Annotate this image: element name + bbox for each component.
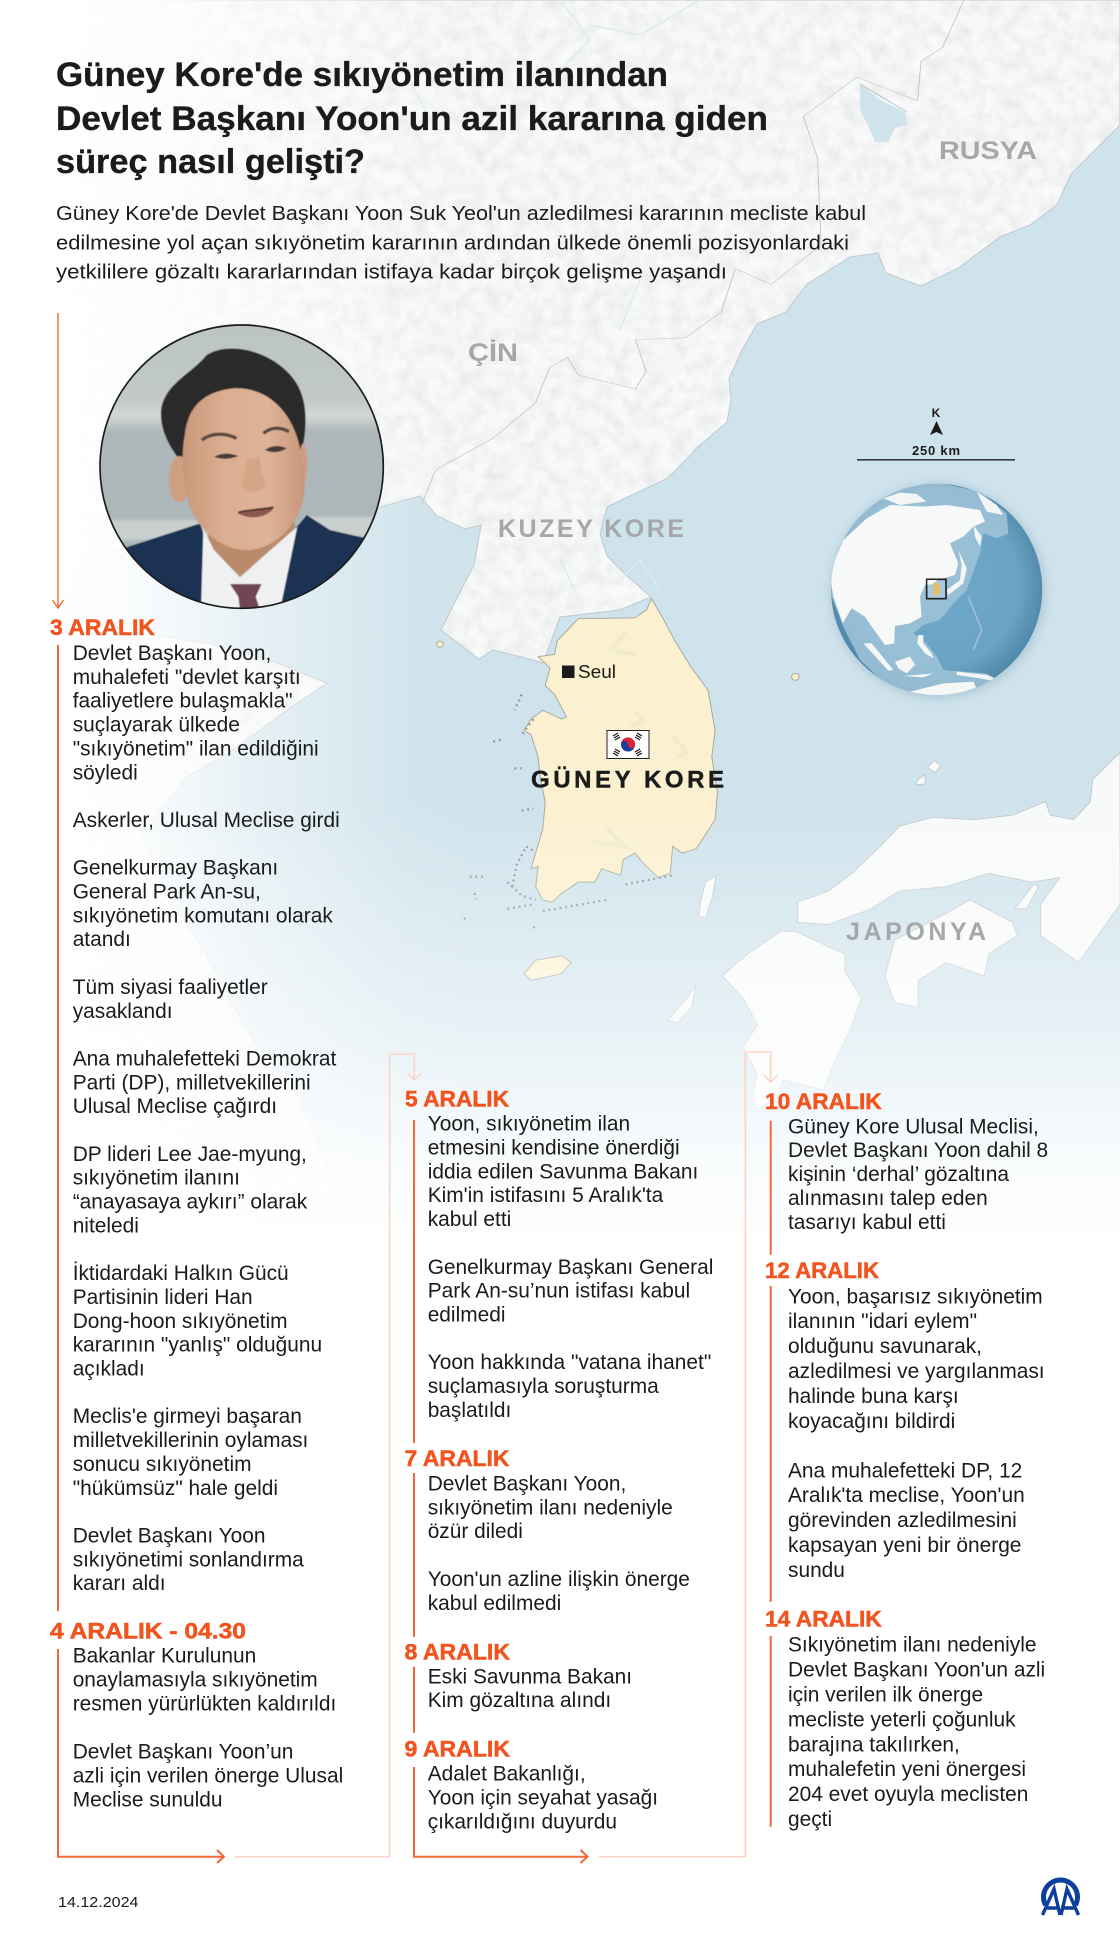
suit xyxy=(126,514,364,602)
date: 3 Aralık: 3 ARALIK xyxy=(50,615,155,640)
mouth xyxy=(237,507,274,517)
text block: 12 Aralık events xyxy=(788,1285,1045,1582)
compass and scale bar: 250 km xyxy=(912,443,960,458)
timeline line 8 Aralık xyxy=(413,1667,415,1733)
timeline arrow to column 3 xyxy=(414,1767,588,1863)
Japan xyxy=(947,550,967,595)
text block: 3 Aralık events: Askerler, Ulusal Meclise girdi xyxy=(73,809,340,832)
text block: 5 Aralık events: Genelkurmay Başkanı General xyxy=(428,1256,713,1279)
borders xyxy=(421,0,964,506)
shelf seas xyxy=(830,482,1008,698)
tie xyxy=(230,584,262,610)
text block: 12 Aralık events: sundu xyxy=(788,1559,845,1582)
label: Güney Kore: GÜNEY KORE xyxy=(531,766,724,794)
connector: column 1 to column 2 xyxy=(235,1054,421,1857)
text block: 3 Aralık events: Dong-hoon sıkıyönetim xyxy=(73,1310,288,1333)
text block: 14 Aralık events: mecliste yeterli çoğunluk xyxy=(788,1708,1016,1731)
South Korea marker xyxy=(927,579,946,599)
neck xyxy=(207,520,296,577)
eyes xyxy=(214,446,287,459)
date stamp: 14.12.2024 xyxy=(58,1895,138,1911)
text block: 12 Aralık events: azledilmesi ve yargılanması xyxy=(788,1360,1045,1383)
icon: South Korea flag xyxy=(607,730,649,758)
text block: 3 Aralık events: niteledi xyxy=(73,1214,139,1237)
text block: 3 Aralık events: söyledi xyxy=(73,761,138,784)
text block: 8 Aralık events: Kim gözaltına alındı xyxy=(428,1689,611,1712)
text block: 10 Aralık events: kişinin ‘derhal’ gözaltına xyxy=(788,1163,1009,1186)
arrow: start of timeline xyxy=(52,313,64,608)
text block: 12 Aralık events: halinde buna karşı xyxy=(788,1385,959,1408)
intro text: yetkililere gözaltı kararlarından istifaya kadar birçok gelişme yaşandı xyxy=(56,262,727,284)
text block: 10 Aralık events: tasarıyı kabul etti xyxy=(788,1211,946,1234)
text block: 3 Aralık events: Parti (DP), milletvekillerini xyxy=(73,1071,311,1094)
text block: 10 Aralık events: Güney Kore Ulusal Meclisi, xyxy=(788,1115,1039,1138)
text block: 3 Aralık events: sonucu sıkıyönetim xyxy=(73,1453,252,1476)
icon: AA logo xyxy=(1042,1880,1078,1915)
land: Japan xyxy=(668,753,1120,1110)
text block: 3 Aralık events: faaliyetlere bulaşmakla" xyxy=(73,690,293,713)
intro text xyxy=(56,203,866,284)
text block: 3 Aralık events: DP lideri Lee Jae-myung, xyxy=(73,1143,307,1166)
text block: 4 Aralık events xyxy=(73,1645,343,1811)
text block: 3 Aralık events: Partisinin lideri Han xyxy=(73,1286,253,1309)
text block: 3 Aralık events: yasaklandı xyxy=(73,1000,173,1023)
shirt xyxy=(201,527,297,610)
text block: 5 Aralık events: kabul etti xyxy=(428,1208,511,1231)
text block: 3 Aralık events: sıkıyönetim komutanı olarak xyxy=(73,904,333,927)
text block: 3 Aralık events: atandı xyxy=(73,928,131,951)
text block: 5 Aralık events: Park An-su’nun istifası kabul xyxy=(428,1280,690,1303)
text block: 3 Aralık events: kararının "yanlış" olduğunu xyxy=(73,1334,322,1357)
Australia xyxy=(910,682,976,695)
text block: 12 Aralık events: olduğunu savunarak, xyxy=(788,1335,982,1358)
bottom fade xyxy=(0,800,1120,1947)
label: Japonya: JAPONYA xyxy=(846,918,986,946)
timeline line 5 Aralık xyxy=(413,1120,415,1443)
text block: 14 Aralık events: Sıkıyönetim ilanı nedeniyle xyxy=(788,1634,1037,1657)
title xyxy=(56,56,768,181)
text block: 8 Aralık events: Eski Savunma Bakanı xyxy=(428,1665,632,1688)
text block: 4 Aralık events: resmen yürürlükten kaldırıldı xyxy=(73,1692,336,1715)
text block: 3 Aralık events: “anayasaya aykırı” olarak xyxy=(73,1191,308,1214)
face xyxy=(183,388,305,550)
text block: 3 Aralık events: İktidardaki Halkın Gücü xyxy=(73,1262,289,1285)
text block: 7 Aralık events xyxy=(428,1472,690,1615)
connector: column 2 to column 3 xyxy=(599,1052,778,1857)
timeline arrow to column 2 xyxy=(58,1649,224,1863)
text block: 14 Aralık events: Devlet Başkanı Yoon'un azli xyxy=(788,1659,1045,1682)
text block: 12 Aralık events: Yoon, başarısız sıkıyönetim xyxy=(788,1285,1043,1308)
text block: 3 Aralık events: Devlet Başkanı Yoon, xyxy=(73,642,271,665)
brows xyxy=(202,428,289,440)
lake: Khanka xyxy=(860,84,907,142)
text block: 4 Aralık events: Meclise sunuldu xyxy=(73,1788,222,1811)
Asia xyxy=(830,505,985,645)
text block: 14 Aralık events: muhalefetin yeni önergesi xyxy=(788,1758,1026,1781)
text block: 5 Aralık events: Kim'in istifasını 5 Aralık'ta xyxy=(428,1184,664,1207)
label: Seul: Seul xyxy=(578,662,616,682)
title: Güney Kore'de sıkıyönetim ilanından xyxy=(56,56,668,94)
date: 4 Aralık: 4 ARALIK - 04.30 xyxy=(50,1619,246,1644)
text block: 3 Aralık events: General Park An-su, xyxy=(73,880,261,904)
text block: 3 Aralık events: Tüm siyasi faaliyetler xyxy=(73,976,268,999)
photo: Yoon Suk Yeol portrait xyxy=(97,323,387,613)
label: Kuzey Kore: KUZEY KORE xyxy=(498,515,684,543)
text block: 3 Aralık events: "hükümsüz" hale geldi xyxy=(73,1477,278,1500)
intro text: edilmesine yol açan sıkıyönetim kararının ardından ülkede önemli pozisyonlardaki xyxy=(56,232,849,254)
panel: background map xyxy=(141,0,1120,1146)
text block: 5 Aralık events: iddia edilen Savunma Bakanı xyxy=(428,1160,698,1183)
Java xyxy=(903,673,933,677)
text block: 10 Aralık events: Devlet Başkanı Yoon dahil 8 xyxy=(788,1139,1048,1162)
text block: 3 Aralık events: kararı aldı xyxy=(73,1572,166,1595)
text block: 3 Aralık events: açıkladı xyxy=(73,1358,145,1380)
land: South Korea xyxy=(437,599,799,980)
panel: timeline column 3 xyxy=(765,1089,1048,1831)
timeline line 14 Aralık xyxy=(770,1636,772,1827)
text block: 5 Aralık events: edilmedi xyxy=(428,1304,506,1326)
text block: 10 Aralık events: alınmasını talep eden xyxy=(788,1187,988,1210)
date: 12 Aralık: 12 ARALIK xyxy=(765,1258,879,1283)
label: Çin: ÇİN xyxy=(468,339,518,367)
text block: 7 Aralık events: Devlet Başkanı Yoon, xyxy=(428,1472,626,1496)
land: Northeast Asia xyxy=(0,0,1120,1200)
intro text: Güney Kore'de Devlet Başkanı Yoon Suk Yeol'un azledilmesi kararının mecliste kabul xyxy=(56,203,866,225)
Borneo xyxy=(895,657,915,673)
label: Seul xyxy=(562,662,616,682)
text block: 10 Aralık events xyxy=(788,1115,1048,1234)
globe locator xyxy=(830,482,1045,698)
text block: 3 Aralık events: sıkıyönetimi sonlandırma xyxy=(73,1548,304,1571)
text block: 9 Aralık events xyxy=(428,1763,658,1833)
text block: 12 Aralık events: Ana muhalefetteki DP, 12 xyxy=(788,1459,1022,1482)
text block: 7 Aralık events: sıkıyönetim ilanı nedeniyle xyxy=(428,1496,673,1519)
text block: 5 Aralık events: etmesini kendisine önerdiği xyxy=(428,1136,680,1160)
text block: 3 Aralık events: Ana muhalefetteki Demokrat xyxy=(73,1048,336,1070)
text block: 9 Aralık events: Adalet Bakanlığı, xyxy=(428,1763,586,1786)
text block: 7 Aralık events: kabul edilmedi xyxy=(428,1592,561,1615)
Kamchatka and Sakhalin xyxy=(973,525,982,547)
Philippines xyxy=(917,635,933,658)
text block: 7 Aralık events: Yoon'un azline ilişkin önerge xyxy=(428,1568,690,1591)
timeline line 12 Aralık xyxy=(770,1286,772,1602)
text block: 3 Aralık events: Ulusal Meclise çağırdı xyxy=(73,1095,277,1118)
date: 10 Aralık: 10 ARALIK xyxy=(765,1089,882,1114)
text block: 5 Aralık events: Yoon, sıkıyönetim ilan xyxy=(428,1113,630,1136)
text block: 3 Aralık events: milletvekillerinin oylaması xyxy=(73,1429,308,1452)
panel: timeline column 1 xyxy=(50,615,343,1863)
text block: 12 Aralık events: Aralık'ta meclise, Yoon'un xyxy=(788,1484,1025,1507)
text block: 5 Aralık events: Yoon hakkında "vatana ihanet" xyxy=(428,1351,711,1374)
text block: 7 Aralık events: özür diledi xyxy=(428,1520,523,1543)
timeline line 7 Aralık xyxy=(413,1473,415,1637)
text block: 3 Aralık events: sıkıyönetim ilanını xyxy=(73,1167,240,1190)
nose xyxy=(242,457,267,492)
text block: 5 Aralık events: suçlamasıyla soruşturma xyxy=(428,1375,659,1398)
text block: 12 Aralık events: ilanının "idari eylem" xyxy=(788,1310,977,1333)
label: Rusya: RUSYA xyxy=(939,137,1037,165)
Sumatra and Malay xyxy=(863,643,893,671)
text block: 5 Aralık events xyxy=(428,1113,713,1422)
text block: 14 Aralık events: geçti xyxy=(788,1808,832,1831)
text block: 3 Aralık events: muhalefeti "devlet karşıtı xyxy=(73,666,301,689)
text block: 3 Aralık events: Meclis'e girmeyi başaran xyxy=(73,1405,302,1428)
text block: 3 Aralık events: suçlayarak ülkede xyxy=(73,714,240,737)
text block: 9 Aralık events: Yoon için seyahat yasağı xyxy=(428,1786,658,1810)
compass and scale bar: K xyxy=(932,406,941,420)
text block: 4 Aralık events: onaylamasıyla sıkıyönetim xyxy=(73,1668,318,1692)
left fade xyxy=(0,0,1120,1300)
text block: 14 Aralık events: barajına takılırken, xyxy=(788,1733,960,1756)
title: süreç nasıl gelişti? xyxy=(56,143,365,181)
text block: 12 Aralık events: koyacağını bildirdi xyxy=(788,1410,955,1433)
date: 14 Aralık: 14 ARALIK xyxy=(765,1607,882,1632)
date: 7 Aralık: 7 ARALIK xyxy=(404,1446,510,1471)
text block: 8 Aralık events xyxy=(428,1665,632,1712)
timeline line 3 Aralık xyxy=(57,645,59,1611)
compass and scale bar xyxy=(857,406,1015,461)
hair xyxy=(161,349,306,468)
Arctic land xyxy=(883,492,1003,515)
date: 5 Aralık: 5 ARALIK xyxy=(405,1087,509,1112)
panel: timeline column 2 xyxy=(404,1087,713,1863)
text block: 5 Aralık events: başlatıldı xyxy=(428,1399,511,1422)
New Guinea xyxy=(956,672,994,680)
date: 8 Aralık: 8 ARALIK xyxy=(404,1639,510,1664)
text block: 9 Aralık events: çıkarıldığını duyurdu xyxy=(428,1810,617,1833)
text block: 3 Aralık events: Devlet Başkanı Yoon xyxy=(73,1524,266,1548)
text block: 12 Aralık events: kapsayan yeni bir önerge xyxy=(788,1534,1021,1557)
text block: 4 Aralık events: azli için verilen önerge Ulusal xyxy=(73,1764,343,1788)
text block: 12 Aralık events: görevinden azledilmesini xyxy=(788,1509,1017,1532)
text block: 14 Aralık events: için verilen ilk önerge xyxy=(788,1684,983,1706)
text block: 4 Aralık events: Devlet Başkanı Yoon’un xyxy=(73,1741,293,1764)
text block: 3 Aralık events: "sıkıyönetim" ilan edildiğini xyxy=(73,737,319,760)
date: 9 Aralık: 9 ARALIK xyxy=(404,1737,510,1762)
text block: 3 Aralık events: Genelkurmay Başkanı xyxy=(73,857,278,880)
text block: 14 Aralık events xyxy=(788,1634,1045,1831)
text block: 14 Aralık events: 204 evet oyuyla meclisten xyxy=(788,1783,1028,1806)
title: Devlet Başkanı Yoon'un azil kararına giden xyxy=(56,100,768,138)
ears xyxy=(169,456,190,503)
text block: 4 Aralık events: Bakanlar Kurulunun xyxy=(73,1645,256,1668)
timeline line 10 Aralık xyxy=(770,1121,772,1255)
text block: 3 Aralık events xyxy=(73,642,340,1595)
